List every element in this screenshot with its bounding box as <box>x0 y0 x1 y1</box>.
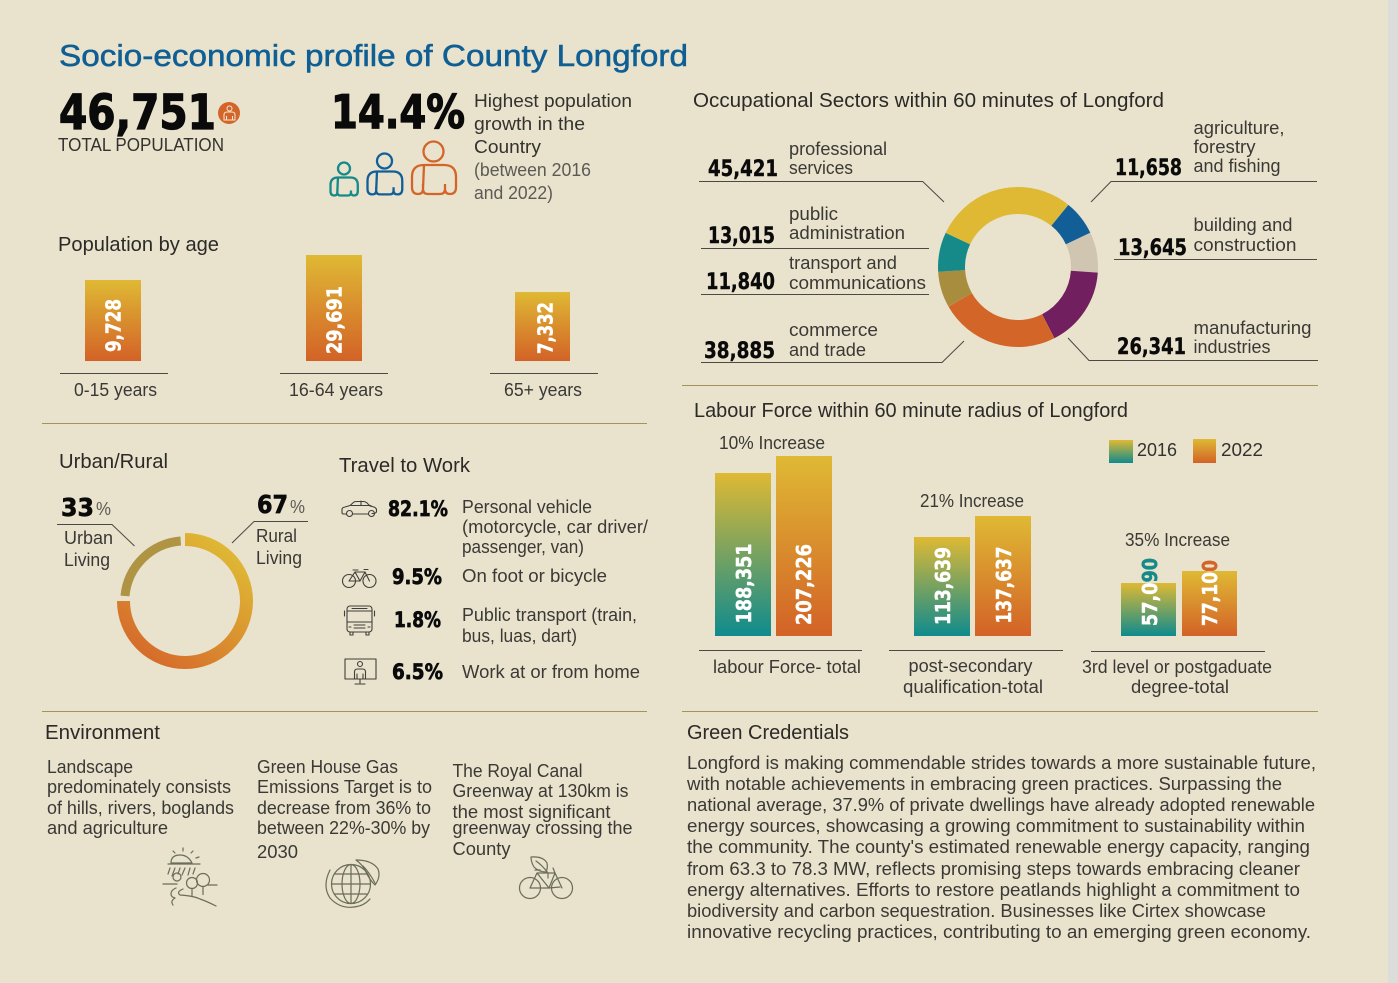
text: green credentials body: the community. The county's estimated renewable energy capacity, ranging <box>687 837 1310 857</box>
panel: urban rural: Rural <box>256 526 297 546</box>
text: green credentials body: Longford is making commendable strides towards a more sustainable future, <box>687 753 1316 773</box>
bar group: post-secondary: 21% Increase <box>920 491 1024 511</box>
panel: population by age <box>58 234 598 400</box>
label: agriculture forestry and fishing: and fishing <box>1194 156 1280 176</box>
label: manufacturing industries: manufacturing <box>1194 318 1312 338</box>
text: emissions: decrease from 36% to <box>257 798 431 818</box>
text: landscape <box>47 757 234 838</box>
label: transport and communications: 11,840 <box>706 270 775 295</box>
bar group: labour force total <box>713 433 861 677</box>
text: royal canal: greenway crossing the <box>452 818 632 838</box>
panel: green credentials <box>686 722 1316 942</box>
panel: population growth: growth in the <box>474 114 585 134</box>
label: professional services: services <box>789 158 853 178</box>
text: royal canal: Greenway at 130km is <box>452 781 628 801</box>
legend: 2022 <box>1221 440 1263 460</box>
bar group: labour force total: 188,351 <box>732 544 756 624</box>
bar group: post-secondary: post-secondary <box>908 656 1032 676</box>
panel: travel to work: 9.5% <box>392 565 442 589</box>
bar: 65+ years: 7,332 <box>534 302 558 354</box>
bar group: labour force total: 207,226 <box>792 544 816 625</box>
bar group: 3rd level <box>1082 530 1272 697</box>
text: green credentials body: innovative recycling practices, contributing to an emerging green economy. <box>687 922 1311 942</box>
text: green credentials body: energy alternatives. Efforts to restore peatlands highlight a commitment to <box>687 880 1300 900</box>
icon: landscape <box>163 848 217 906</box>
panel: population by age: 16-64 years <box>289 380 383 400</box>
panel: environment <box>45 722 632 907</box>
bar: 16-64 years <box>306 255 362 361</box>
icon: bus <box>344 606 374 635</box>
panel: total population: TOTAL POPULATION <box>58 135 224 155</box>
bar group: 3rd level: 57,090 <box>1138 558 1162 626</box>
panel: travel to work: Work at or from home <box>462 662 640 682</box>
label: professional services: 45,421 <box>708 157 778 182</box>
text: green credentials body: national average, 37.9% of private dwellings have already adopted renewable <box>687 795 1315 815</box>
bar: 16-64 years: 29,691 <box>322 286 346 354</box>
panel: environment: Environment <box>45 722 160 744</box>
panel: occupational sectors: Occupational Sectors within 60 minutes of Longford <box>693 90 1164 112</box>
bar group: 3rd level: 3rd level or postgaduate <box>1082 657 1272 677</box>
label: commerce and trade <box>704 320 878 364</box>
label: agriculture forestry and fishing: forestry <box>1194 137 1256 157</box>
label: manufacturing industries: 26,341 <box>1117 335 1186 360</box>
panel: urban rural: 67 <box>257 490 288 519</box>
bar group: 3rd level: degree-total <box>1131 677 1229 697</box>
label: professional services: professional <box>789 139 887 159</box>
panel: labour force <box>694 400 1272 697</box>
label: agriculture forestry and fishing: 11,658 <box>1115 156 1182 181</box>
panel: population growth: Highest population <box>474 91 632 111</box>
panel: travel to work: On foot or bicycle <box>462 566 607 586</box>
label: building and construction <box>1118 215 1296 261</box>
panel: population by age: 0-15 years <box>74 380 157 400</box>
text: green credentials body: with notable achievements in embracing green practices. Surpassing the <box>686 774 1282 794</box>
donut: urban rural <box>124 540 246 662</box>
text: landscape: Landscape <box>47 757 133 777</box>
panel: population growth <box>330 85 632 203</box>
panel: population by age: Population by age <box>58 234 219 256</box>
label: building and construction: 13,645 <box>1118 236 1187 261</box>
panel: population growth: and 2022) <box>474 183 553 203</box>
icon: globe with leaf <box>326 860 379 907</box>
text: emissions: between 22%-30% by <box>257 818 430 838</box>
text: emissions <box>257 757 432 862</box>
label: public administration <box>708 204 905 249</box>
label: commerce and trade: and trade <box>789 340 866 360</box>
bar group: 3rd level: 35% Increase <box>1125 530 1230 550</box>
panel: urban rural <box>57 451 308 662</box>
text: royal canal: County <box>452 839 510 859</box>
bar: 65+ years <box>515 292 570 361</box>
panel: population growth: (between 2016 <box>474 160 591 180</box>
panel: travel to work: (motorcycle, car driver/ <box>462 517 648 537</box>
label: public administration: public <box>789 204 838 224</box>
text: royal canal: The Royal Canal <box>452 761 582 781</box>
panel: occupational sectors <box>693 90 1318 364</box>
panel: population growth: 14.4% <box>331 85 465 139</box>
panel: urban rural: 33 <box>61 493 94 522</box>
bar: 0-15 years: 9,728 <box>102 299 126 352</box>
icon: three people <box>330 142 456 195</box>
panel: urban rural: % <box>290 497 305 517</box>
label: commerce and trade: 38,885 <box>704 339 775 364</box>
bar group: post-secondary: 137,637 <box>992 546 1016 624</box>
text: landscape: predominately consists <box>47 777 231 797</box>
panel: travel to work <box>339 455 648 684</box>
panel: labour force: Labour Force within 60 minute radius of Longford <box>694 400 1128 422</box>
donut: occupational sectors <box>924 173 1112 361</box>
label: manufacturing industries <box>1117 318 1312 360</box>
panel: travel to work: Travel to Work <box>339 455 471 477</box>
label: professional services <box>708 139 887 182</box>
legend <box>1109 439 1263 463</box>
panel: urban rural: % <box>96 499 111 519</box>
panel: travel to work: 1.8% <box>394 608 441 632</box>
text: emissions: 2030 <box>257 842 298 862</box>
text: royal canal <box>452 761 632 859</box>
panel: travel to work: 6.5% <box>392 660 443 684</box>
text: emissions: Green House Gas <box>257 757 398 777</box>
text: green credentials body: from 63.3 to 78.3 MW, reflects promising steps towards embracing cleaner <box>687 859 1300 879</box>
panel: travel to work: 82.1% <box>388 497 448 521</box>
text: green credentials body: biodiversity and carbon sequestration. Businesses like Cirtex showcase <box>687 901 1266 921</box>
icon: person badge <box>218 102 240 124</box>
label: building and construction: building and <box>1194 215 1292 235</box>
label: agriculture forestry and fishing: agriculture, <box>1194 118 1284 138</box>
label: manufacturing industries: industries <box>1194 337 1270 357</box>
panel: urban rural: Living <box>64 550 110 570</box>
label: public administration: 13,015 <box>708 224 775 249</box>
bar: 0-15 years <box>85 280 141 361</box>
bar group: labour force total: labour Force- total <box>713 657 861 677</box>
icon: bicycle <box>342 570 376 588</box>
panel: urban rural: Living <box>256 548 302 568</box>
label: public administration: administration <box>789 223 905 243</box>
panel: population by age: 65+ years <box>504 380 582 400</box>
text: royal canal: the most significant <box>452 802 610 822</box>
label: transport and communications <box>706 253 926 295</box>
label: transport and communications: transport and <box>789 253 897 273</box>
text: emissions: Emissions Target is to <box>257 777 432 797</box>
label: commerce and trade: commerce <box>789 320 878 340</box>
text: green credentials body <box>686 753 1316 942</box>
bar group: post-secondary: 113,639 <box>931 547 955 625</box>
icon: monitor <box>345 659 376 684</box>
label: transport and communications: communications <box>789 273 926 293</box>
text: green credentials body: energy sources, showcasing a growing commitment to sustainability within <box>687 816 1305 836</box>
panel: green credentials: Green Credentials <box>687 722 849 744</box>
panel: travel to work: bus, luas, dart) <box>462 626 577 646</box>
label: agriculture forestry and fishing <box>1115 118 1284 181</box>
text: landscape: of hills, rivers, boglands <box>47 798 234 818</box>
panel: population growth: Country <box>474 137 541 157</box>
panel: travel to work: passenger, van) <box>462 537 584 557</box>
panel: travel to work: Public transport (train, <box>462 605 637 625</box>
panel: urban rural: Urban <box>64 528 113 548</box>
label: building and construction: construction <box>1194 235 1296 255</box>
text: landscape: and agriculture <box>47 818 168 838</box>
icon: car <box>342 501 376 516</box>
bar group: post-secondary <box>903 491 1043 697</box>
title: Socio-economic profile of County Longford <box>59 38 688 73</box>
legend: 2016 <box>1137 440 1177 460</box>
icon: bicycle with leaf <box>520 857 572 898</box>
bar group: labour force total: 10% Increase <box>719 433 825 453</box>
panel: total population: 46,751 <box>59 85 216 141</box>
bar group: 3rd level: 77,100 <box>1198 560 1222 626</box>
panel: travel to work: Personal vehicle <box>462 497 592 517</box>
panel: urban rural: Urban/Rural <box>59 451 168 473</box>
bar group: post-secondary: qualification-total <box>903 677 1043 697</box>
